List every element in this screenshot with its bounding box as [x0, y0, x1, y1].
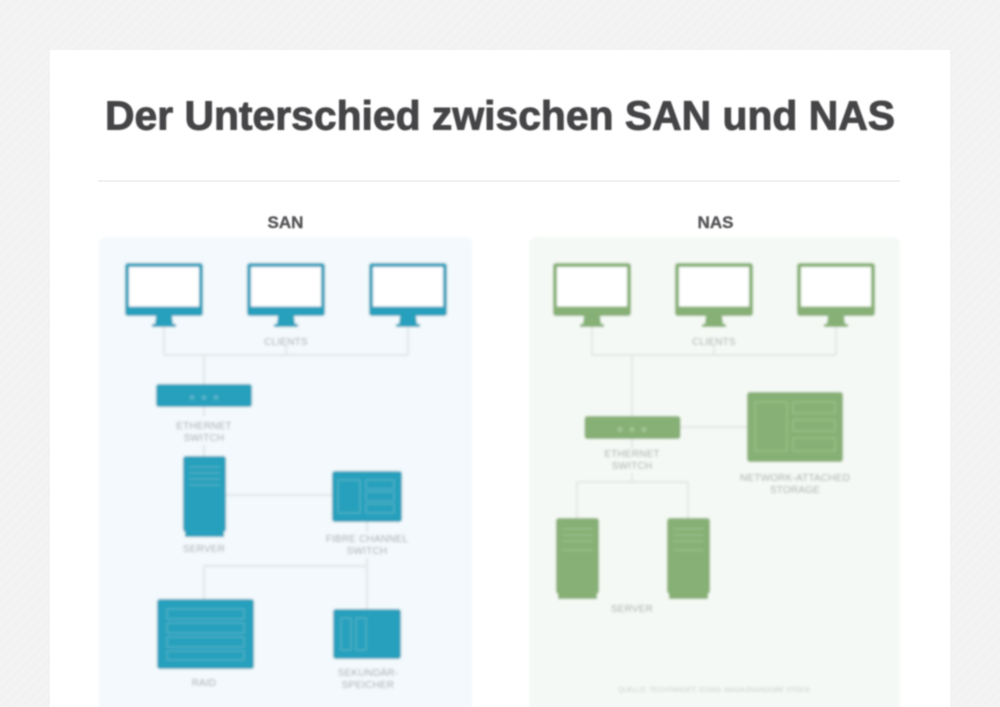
- icon: network-attached storage: [747, 392, 843, 462]
- label: fibre channel switch: SWITCH: [347, 546, 387, 557]
- icon: client monitor 3: [797, 263, 875, 327]
- label: network-attached storage: NETWORK-ATTACHED: [740, 473, 850, 484]
- label: ethernet switch: SWITCH: [612, 461, 652, 472]
- icon: client monitor 2: [247, 263, 325, 327]
- icon: fibre channel switch: [332, 471, 402, 522]
- icon: client monitor 1: [125, 263, 203, 327]
- icon: ethernet switch: [584, 416, 680, 439]
- icon: server: [183, 456, 226, 537]
- label: network-attached storage: STORAGE: [770, 485, 820, 496]
- icon: RAID: [157, 599, 254, 669]
- panel: NAS: [529, 237, 900, 707]
- label: RAID: RAID: [192, 678, 216, 689]
- label: clients: CLIENTS: [692, 337, 736, 348]
- label: server: SERVER: [611, 604, 653, 615]
- label: secondary storage: SEKUNDÄR-: [338, 668, 398, 679]
- heading: NAS: NAS: [698, 213, 733, 232]
- title: Der Unterschied zwischen SAN und NAS: [105, 92, 895, 138]
- label: server: SERVER: [183, 544, 225, 555]
- heading: SAN: SAN: [268, 213, 303, 232]
- icon: client monitor 1: [553, 263, 631, 327]
- label: ethernet switch: SWITCH: [184, 433, 224, 444]
- icon: client monitor 2: [675, 263, 753, 327]
- divider: [98, 180, 900, 182]
- label: ethernet switch: ETHERNET: [176, 421, 232, 432]
- icon: client monitor 3: [369, 263, 447, 327]
- label: secondary storage: SPEICHER: [342, 680, 394, 691]
- icon: secondary storage: [333, 609, 401, 659]
- source note: QUELLE: TECHTARGET; ICONS: MAGAJNA/ADOBE STOCK: [618, 687, 810, 694]
- label: ethernet switch: ETHERNET: [604, 449, 660, 460]
- icon: server 2: [667, 518, 710, 599]
- panel: SAN: [99, 237, 472, 707]
- icon: ethernet switch: [156, 384, 252, 407]
- label: clients: CLIENTS: [264, 337, 308, 348]
- label: fibre channel switch: FIBRE CHANNEL: [326, 534, 408, 545]
- icon: server 1: [556, 518, 599, 599]
